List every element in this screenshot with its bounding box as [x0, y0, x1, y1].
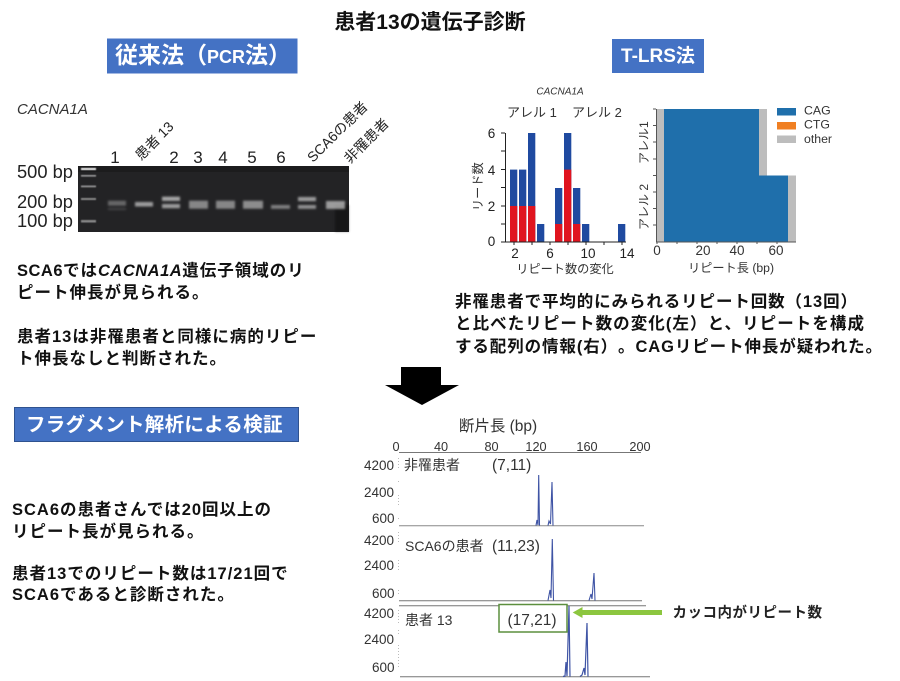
chart: repeat count change histogram: 14: [619, 246, 635, 261]
chart: repeat count change histogram: CACNA1A: [536, 86, 584, 98]
gel panel: PCR electrophoresis: [17, 98, 392, 232]
lane labels: 5: [247, 148, 257, 167]
chart: repeat count change histogram: アレル 1: [507, 105, 557, 120]
trace: unaffected: 2400: [364, 485, 394, 500]
chart: repeat composition: [637, 104, 832, 275]
chart: repeat composition: 40: [729, 243, 745, 258]
trace: patient 13: 600: [372, 660, 395, 675]
lane labels: SCA6の患者: [304, 98, 371, 165]
callout box: patient 13 repeats: (17,21): [507, 612, 557, 629]
chart: repeat composition: 60: [768, 243, 784, 258]
lane labels: 患者 13: [132, 118, 177, 163]
text block: T-LRS findings: と比べたリピート数の変化(左）と、リピートを構成: [455, 313, 864, 333]
heading: fragment analysis: フラグメント解析による検証: [26, 413, 283, 436]
size markers: [17, 161, 73, 231]
chart: repeat count change histogram: リード数: [470, 162, 485, 211]
text block: T-LRS findings: する配列の情報(右）。CAGリピート伸長が疑われた。: [455, 336, 882, 356]
trace: unaffected: 非罹患者: [404, 457, 460, 473]
ladder bands: [81, 168, 96, 222]
axes: [501, 133, 626, 245]
text block: PCR findings: [17, 261, 317, 368]
size markers: 200 bp: [17, 191, 73, 212]
text block: T-LRS findings: [455, 292, 882, 356]
trace: patient 13: 患者 13: [405, 612, 453, 628]
trace: unaffected: (7,11): [492, 457, 531, 474]
text block: PCR findings: 患者13は非罹患者と同様に病的リピー: [17, 327, 317, 346]
chart: repeat count change histogram: 6: [488, 126, 495, 141]
text block: fragment findings: SCA6の患者さんでは20回以上の: [12, 500, 272, 519]
top axis: 120: [525, 440, 547, 454]
legend: [777, 104, 832, 146]
chart: fragment analysis traces: [364, 417, 651, 677]
trace: unaffected: [364, 457, 644, 526]
trace: SCA6 patient: (11,23): [492, 538, 540, 555]
lane labels: 2: [169, 148, 179, 167]
top axis: 40: [434, 440, 448, 454]
text block: fragment findings: 患者13でのリピート数は17/21回で: [12, 564, 289, 583]
chart: repeat count change histogram: 2: [488, 199, 495, 214]
chart: repeat composition: リピート長 (bp): [688, 261, 774, 275]
chart: repeat count change histogram: 2: [511, 246, 519, 261]
trace: patient 13: 4200: [364, 606, 394, 621]
stacked bars: [510, 133, 625, 242]
trace: patient 13: 2400: [364, 632, 394, 647]
trace: SCA6 patient: [364, 532, 642, 601]
trace: unaffected: 4200: [364, 458, 394, 473]
size markers: 500 bp: [17, 161, 73, 182]
annotation: repeat count note: カッコ内がリピート数: [672, 604, 822, 622]
trace: patient 13: [364, 606, 650, 677]
text block: PCR findings: ト伸長なしと判断された。: [17, 349, 227, 368]
text block: T-LRS findings: 非罹患者で平均的にみられるリピート回数（13回）: [455, 292, 857, 311]
top axis: [392, 440, 651, 454]
chart: repeat composition: アレル1: [637, 121, 651, 164]
trace: SCA6 patient: 4200: [364, 533, 394, 548]
chart: fragment analysis traces: 断片長 (bp): [459, 417, 537, 435]
text block: PCR findings: SCA6ではCACNA1A遺伝子領域のリ: [17, 261, 305, 280]
lane labels: 3: [193, 148, 203, 167]
lane labels: 4: [218, 148, 228, 167]
heading: conventional PCR method: [107, 38, 298, 74]
text block: fragment findings: SCA6であると診断された。: [12, 585, 235, 604]
legend: CTG: [804, 118, 830, 132]
legend: CAG: [804, 104, 831, 118]
chart: repeat count change histogram: [470, 86, 635, 276]
text block: fragment findings: リピート長が見られる。: [12, 521, 204, 541]
trace: SCA6 patient: 600: [372, 586, 395, 601]
size markers: 100 bp: [17, 210, 73, 231]
sample bands: [108, 197, 345, 210]
lane labels: 6: [276, 148, 286, 167]
chart: repeat count change histogram: アレル 2: [572, 105, 622, 120]
lane labels: 非罹患者: [341, 115, 392, 166]
heading: fragment analysis: [14, 408, 298, 442]
top axis: 80: [484, 440, 499, 454]
chart: repeat composition: 20: [695, 243, 711, 258]
trace: unaffected: 600: [372, 511, 395, 526]
top axis: 200: [629, 440, 651, 454]
top axis: 0: [392, 440, 400, 454]
chart: repeat count change histogram: 0: [488, 234, 495, 249]
callout box: patient 13 repeats: [499, 604, 567, 632]
heading: T-LRS method: [612, 39, 704, 73]
chart: repeat count change histogram: リピート数の変化: [516, 261, 614, 276]
top axis: 160: [576, 440, 598, 454]
arrow: downward black: [385, 367, 459, 405]
legend: other: [804, 132, 832, 146]
chart: repeat count change histogram: 10: [580, 246, 596, 261]
heading: T-LRS method: T-LRS法: [621, 45, 695, 67]
heading: conventional PCR method: 従来法（PCR法）: [115, 42, 291, 68]
lane labels: [110, 98, 392, 167]
gel image: [78, 166, 349, 232]
title: 患者13の遺伝子診断: [334, 11, 526, 34]
chart: repeat count change histogram: 4: [488, 163, 496, 178]
trace: SCA6 patient: 2400: [364, 558, 394, 573]
chart: repeat composition: アレル 2: [637, 184, 651, 230]
arrow: green pointing to callout: [573, 607, 662, 618]
gene label: CACNA1A: [17, 101, 88, 118]
trace: SCA6 patient: SCA6の患者: [405, 538, 484, 554]
text block: PCR findings: ピート伸長が見られる。: [17, 282, 210, 302]
lane labels: 1: [110, 148, 120, 167]
chart: repeat composition: 0: [653, 243, 661, 258]
text block: fragment findings: [12, 500, 289, 604]
chart: repeat count change histogram: 6: [546, 246, 554, 261]
